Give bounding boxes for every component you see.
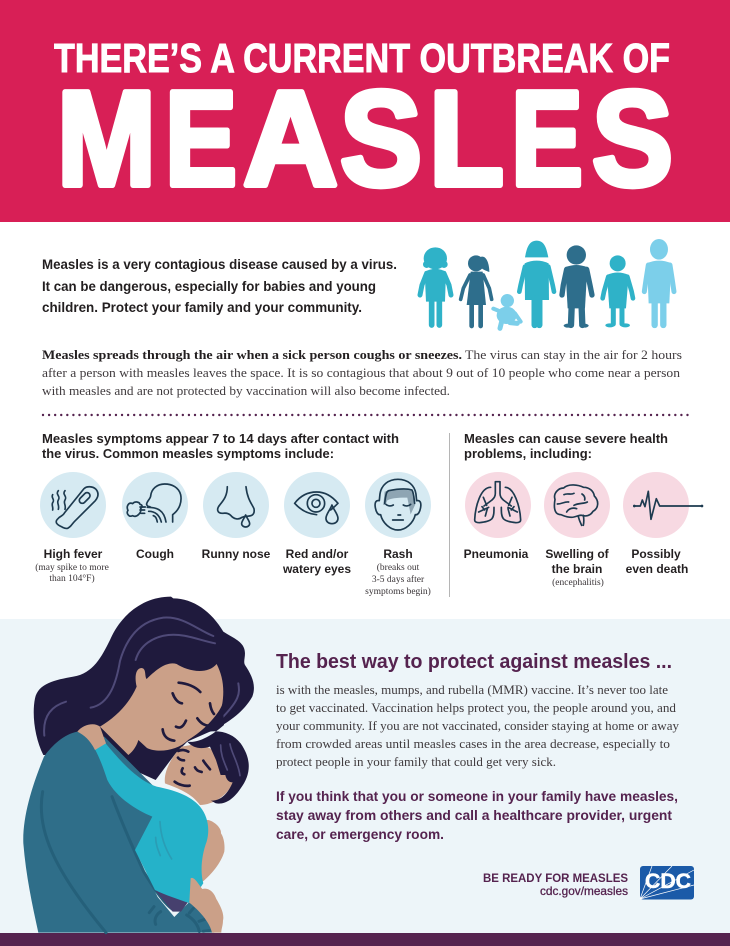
symptom: rash: 3-5 days after (372, 574, 425, 585)
symptom: runny nose: Runny nose (202, 547, 271, 561)
callout: what to do if sick: stay away from others and call a healthcare provider, urgent (276, 808, 673, 823)
title: MEASLES: S (340, 63, 422, 214)
complication: swelling of the brain (544, 472, 610, 588)
call to action: be ready (483, 873, 628, 898)
heading: symptoms: the virus. Common measles symptoms include: (42, 447, 334, 461)
symptom: high fever: (may spike to more (35, 562, 109, 573)
paragraph: MMR vaccine: is with the measles, mumps, and rubella (MMR) vaccine. It’s never too late (276, 682, 668, 697)
paragraph: MMR vaccine: to get vaccinated. Vaccination helps protect you, the people around you, and (276, 700, 676, 715)
panel: protection background (0, 619, 730, 933)
symptom: rash: Rash (383, 547, 413, 561)
heading: symptoms (42, 432, 399, 461)
heading: best way to protect: The best way to protect against measles ... (276, 651, 672, 673)
title: MEASLES: L (429, 63, 504, 214)
paragraph: MMR vaccine: protect people in your family that could get very sick. (276, 754, 556, 769)
symptom: rash (365, 472, 431, 597)
intro text: Measles is a very contagious disease caused by a virus. (42, 256, 397, 272)
heading: severe health problems: problems, including: (464, 447, 592, 461)
symptom: high fever: than 104°F) (49, 573, 95, 584)
paragraph: how measles spreads: Measles spreads through the air when a sick person coughs or sneezes. (42, 347, 462, 362)
symptom: rash: (breaks out (377, 562, 420, 573)
complication: swelling of the brain: Swelling of (545, 547, 610, 561)
logo: CDC (640, 866, 694, 900)
header banner (0, 0, 730, 222)
paragraph: how measles spreads: The virus can stay in the air for 2 hours (465, 347, 682, 362)
call to action: be ready: cdc.gov/measles (540, 884, 628, 898)
child: girl with ponytail (461, 255, 492, 326)
title: MEASLES: S (592, 63, 673, 214)
symptom: red and watery eyes (282, 472, 351, 576)
paragraph: how measles spreads: with measles and are not protected by vaccination will also become infected. (42, 383, 450, 398)
panel: severe complications icons (464, 472, 703, 588)
icon: group of children silhouettes (420, 239, 674, 328)
complication: possibly even death: Possibly (631, 547, 681, 561)
child: girl in dress (519, 241, 554, 325)
heading: severe health problems: Measles can cause severe health (464, 432, 668, 446)
complication: pneumonia: Pneumonia (464, 547, 529, 561)
title: MEASLES: E (511, 63, 583, 214)
title: MEASLES: E (165, 63, 237, 214)
callout: what to do if sick: If you think that you or someone in your family have measles, (276, 789, 678, 804)
child: girl with pigtails (420, 247, 451, 325)
logo: CDC: CDC (645, 870, 691, 893)
paragraph: MMR vaccine (276, 682, 679, 769)
title: MEASLES (57, 63, 673, 214)
child: boy in shorts (603, 255, 633, 327)
child: boy with curly hair (562, 245, 592, 328)
paragraph: MMR vaccine: your community. If you are not vaccinated, consider staying at home or away (276, 718, 679, 733)
paragraph: how measles spreads: after a person with measles leaves the space. It is so contagious that about 9 out of 10 people who come near a person (42, 365, 681, 380)
heading: symptoms: Measles symptoms appear 7 to 14 days after contact with (42, 432, 399, 446)
child: sitting baby (493, 294, 521, 328)
symptom: high fever: High fever (44, 547, 103, 561)
paragraph: how measles spreads (42, 347, 682, 398)
heading: severe health problems (464, 432, 668, 461)
panel: symptom icons (35, 472, 431, 597)
complication: possibly even death: even death (626, 562, 688, 576)
child: tall boy (644, 239, 674, 325)
intro text: It can be dangerous, especially for babies and young (42, 278, 376, 294)
symptom: high fever (35, 472, 109, 584)
callout: what to do if sick: care, or emergency room. (276, 827, 444, 842)
intro text: children. Protect your family and your community. (42, 299, 362, 315)
illustration: mother hugging child (23, 597, 254, 933)
complication: pneumonia (464, 472, 531, 561)
complication: swelling of the brain: the brain (552, 562, 602, 576)
footer bar (0, 933, 730, 946)
symptom: cough: Cough (136, 547, 174, 561)
call to action: be ready: BE READY FOR MEASLES (483, 873, 628, 885)
title: MEASLES: M (57, 63, 156, 214)
symptom: red and watery eyes: Red and/or (286, 547, 349, 561)
symptom: red and watery eyes: watery eyes (282, 562, 351, 576)
paragraph: MMR vaccine: from crowded areas until measles cases in the area decrease, especially to (276, 736, 670, 751)
symptom: rash: symptoms begin) (365, 586, 431, 597)
complication: swelling of the brain: (encephalitis) (552, 577, 604, 588)
symptom: cough (122, 472, 188, 561)
complication: possibly even death (623, 472, 703, 576)
symptom: runny nose (202, 472, 271, 561)
title: MEASLES: A (243, 63, 338, 214)
callout: what to do if sick (276, 789, 678, 842)
intro text (42, 256, 397, 315)
